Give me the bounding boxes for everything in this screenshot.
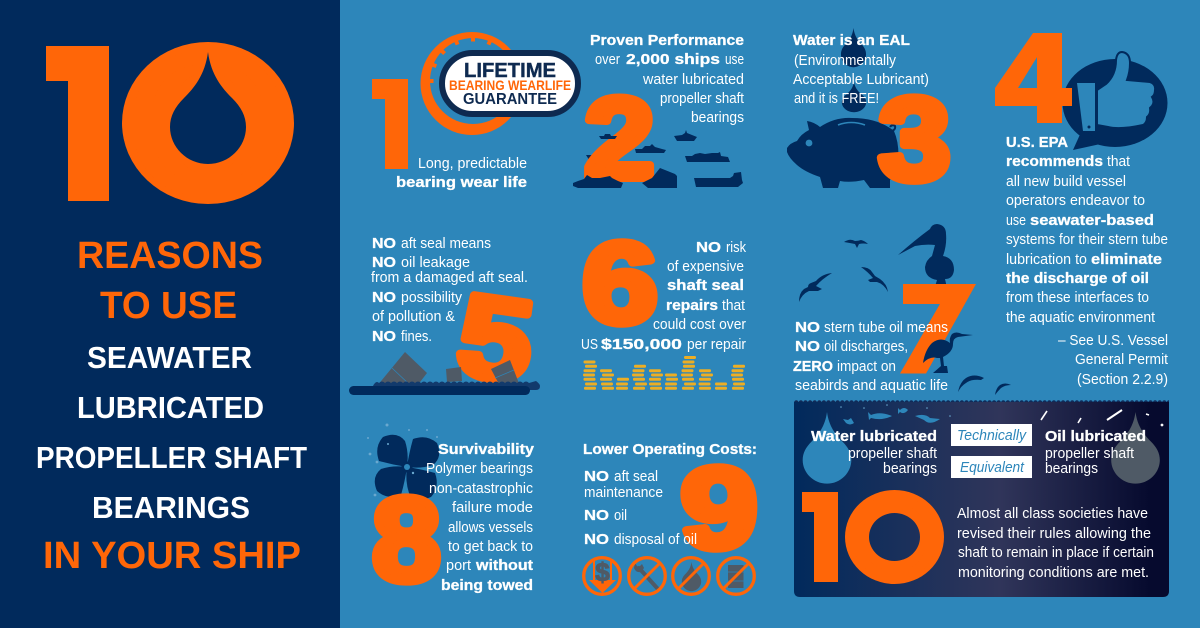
badge: lifetime bearing wearlife guarantee: LIFETIME: [464, 60, 556, 82]
text: survivability: non-catastrophic: [429, 480, 533, 497]
text: proven performance: propeller shaft: [660, 90, 745, 107]
text: no aft seal: of pollution &: [372, 308, 455, 325]
text: survivability: [426, 441, 535, 594]
text: lower operating costs: oil: [614, 507, 627, 524]
panel: reason 9 lower operating costs: [583, 441, 758, 594]
number 2: 2: [584, 74, 655, 203]
text: EPA recommendation: lubrication to: [1006, 251, 1087, 268]
text: EPA recommendation: from these interfaces to: [1006, 289, 1149, 306]
text: EPA recommendation: seawater-based: [1030, 212, 1154, 229]
text: no stern tube oil: [793, 319, 948, 394]
number 1: 1: [371, 64, 422, 188]
text: survivability: being towed: [441, 577, 533, 594]
text: survivability: allows vessels: [448, 519, 533, 536]
heading: reasons to use: REASONS: [77, 235, 263, 277]
text: EPA recommendation: that: [1107, 153, 1131, 170]
text: no aft seal: NO: [372, 254, 396, 271]
text: survivability: without: [475, 557, 533, 574]
panel: reason 1 lifetime guarantee: [371, 32, 578, 191]
icon: dead fish bones: [1041, 410, 1163, 426]
text: bearing wear life: bearing wear life: [396, 174, 527, 191]
text: no stern tube oil: NO: [795, 319, 820, 336]
text: lower operating costs: aft seal: [614, 468, 658, 485]
panel: reason 8 survivability: [367, 424, 535, 606]
text: EPA recommendation: use: [1006, 212, 1026, 229]
text: no risk of repairs: of expensive: [667, 258, 744, 275]
panel: reason 6 shaft seal repairs: [581, 219, 746, 390]
icon: no maintenance: [629, 558, 665, 594]
text: EPA recommendation: operators endeavor to: [1006, 192, 1145, 209]
number 10: 0: [852, 483, 937, 597]
text: EPA recommendation: [1006, 134, 1169, 388]
text: EPA recommendation: – See U.S. Vessel: [1058, 332, 1168, 349]
text: no risk of repairs: that: [722, 297, 746, 314]
panel: reason 10 class societies: [794, 400, 1169, 601]
text: no risk of repairs: could cost over: [653, 316, 746, 333]
text: no risk of repairs: US: [581, 336, 598, 353]
big number 10 with water drop: 1: [43, 22, 134, 234]
icon: water drop: [803, 412, 851, 484]
text: water is an EAL: Water is an EAL: [793, 32, 910, 49]
badge: lifetime bearing wearlife guarantee: [442, 53, 578, 114]
text: water lubricated: propeller shaft: [848, 445, 938, 462]
text: water lubricated: bearings: [883, 460, 937, 477]
text: class societies: revised their rules allowing the: [957, 525, 1151, 542]
text: water is an EAL: (Environmentally: [794, 52, 896, 69]
text: class societies: Almost all class societies have: [957, 505, 1148, 522]
text: no stern tube oil: NO: [795, 338, 820, 355]
text: proven performance: over: [595, 51, 620, 68]
icon: propeller: [367, 424, 439, 499]
text: no stern tube oil: seabirds and aquatic life: [795, 377, 948, 394]
text: class societies: monitoring conditions are met.: [958, 564, 1149, 581]
icon: falling water drops: [841, 28, 866, 112]
icon: piggy bank: [787, 118, 898, 188]
badge: lifetime bearing wearlife guarantee: GUARANTEE: [463, 91, 557, 108]
big number 10 with water drop: [46, 42, 294, 204]
text: EPA recommendation: General Permit: [1075, 351, 1169, 368]
text: oil lubricated: [1045, 428, 1146, 477]
text: water is an EAL: and it is FREE!: [794, 90, 879, 107]
number 10: [802, 490, 944, 584]
text: no risk of repairs: $150,000: [601, 336, 682, 353]
text: no risk of repairs: shaft seal: [667, 277, 744, 294]
text: proven performance: Proven Performance: [590, 32, 744, 49]
text: EPA recommendation: systems for their stern tube: [1006, 231, 1168, 248]
icon: floating barrels on water: [349, 352, 540, 395]
icon: fleet of ships: [573, 130, 743, 188]
text: no stern tube oil: ZERO: [793, 358, 833, 375]
panel: reason 4 U.S. EPA: [991, 14, 1169, 388]
text: survivability: Polymer bearings: [426, 460, 533, 477]
text: no aft seal: aft seal means: [401, 235, 491, 252]
text: water lubricated: [811, 428, 938, 477]
text: lower operating costs: [583, 441, 757, 548]
text: bearing wear life: [396, 155, 527, 191]
text: class societies: [957, 505, 1154, 581]
heading: reasons to use: TO USE: [100, 285, 237, 327]
badge: lifetime bearing wearlife guarantee: BEARING WEARLIFE: [449, 77, 571, 93]
text: oil lubricated: Oil lubricated: [1045, 428, 1146, 445]
panel: reason 5 no aft seal: [349, 235, 541, 408]
text: bearing wear life: Long, predictable: [418, 155, 527, 172]
number 10: 1: [799, 477, 853, 601]
text: no aft seal: [371, 235, 528, 345]
panel: reason 2 proven performance: [573, 32, 745, 203]
text: no aft seal: NO: [372, 328, 396, 345]
number 3: 3: [878, 74, 951, 205]
number 5: 5: [450, 270, 541, 408]
text: lower operating costs: NO: [584, 531, 609, 548]
text: no risk of repairs: NO: [696, 239, 721, 256]
text: EPA recommendation: recommends: [1006, 153, 1103, 170]
icon: cost down arrow: $: [595, 557, 610, 587]
text: EPA recommendation: the discharge of oil: [1006, 270, 1149, 287]
text: no risk of repairs: risk: [726, 239, 746, 256]
icon: flying seabirds: [799, 240, 888, 302]
text: survivability: to get back to: [448, 538, 533, 555]
text: lower operating costs: disposal of oil: [614, 531, 697, 548]
icon: live fish: [840, 404, 951, 424]
text: no stern tube oil: stern tube oil means: [824, 319, 948, 336]
number 7: 7: [888, 263, 972, 399]
icon: heron: [923, 332, 973, 373]
text: no aft seal: NO: [372, 289, 396, 306]
text: no risk of repairs: per repair: [687, 336, 746, 353]
icon: cost down arrow: [584, 557, 620, 594]
text: oil lubricated: propeller shaft: [1045, 445, 1135, 462]
icon: no oil barrel: [718, 558, 754, 594]
text: proven performance: [590, 32, 745, 126]
text: lower operating costs: NO: [584, 468, 609, 485]
text: survivability: port: [446, 557, 472, 574]
panel: reason 7 seabirds: [793, 224, 1011, 399]
text: no aft seal: possibility: [401, 289, 462, 306]
icon: leaping fish: [958, 376, 1011, 395]
heading: reasons to use: BEARINGS: [92, 490, 250, 525]
number 6: 6: [582, 219, 658, 347]
text: lower operating costs: NO: [584, 507, 609, 524]
text: no risk of repairs: [581, 239, 746, 353]
icon: oil drop: [1111, 412, 1160, 484]
chart: coin stacks: [583, 356, 745, 390]
panel: title sidebar: [0, 0, 340, 628]
text: lower operating costs: maintenance: [584, 484, 663, 501]
text: no aft seal: from a damaged aft seal.: [371, 269, 528, 286]
text: water lubricated: Water lubricated: [811, 428, 937, 445]
text: lower operating costs: Lower Operating Costs:: [583, 441, 757, 458]
icon: ships behind number: [586, 144, 666, 163]
icon: thumbs up speech bubble: [1062, 52, 1168, 150]
text: proven performance: 2,000 ships: [626, 51, 720, 68]
text: no risk of repairs: repairs: [666, 297, 718, 314]
text: no aft seal: oil leakage: [401, 254, 470, 271]
text: water is an EAL: Acceptable Lubricant): [793, 71, 929, 88]
number 8: 8: [372, 472, 441, 606]
icon: pelican: [898, 224, 954, 291]
text: EPA recommendation: U.S. EPA: [1006, 134, 1068, 151]
text: proven performance: water lubricated: [642, 71, 744, 88]
panel: reason 3 water is an EAL: [787, 28, 951, 205]
text: proven performance: use: [725, 51, 744, 68]
label: technically: Technically: [957, 427, 1027, 444]
label: equivalent: Equivalent: [960, 459, 1025, 476]
label: equivalent: [951, 456, 1032, 478]
text: EPA recommendation: eliminate: [1091, 251, 1162, 268]
text: no stern tube oil: impact on: [837, 358, 896, 375]
heading: reasons to use: [36, 235, 307, 577]
big number 10 with water drop: 0: [131, 24, 285, 228]
heading: reasons to use: SEAWATER: [87, 340, 252, 375]
text: no aft seal: NO: [372, 235, 396, 252]
text: EPA recommendation: all new build vessel: [1006, 173, 1126, 190]
icon: no oil: [673, 558, 709, 594]
number 4: 4: [991, 14, 1075, 147]
heading: reasons to use: PROPELLER SHAFT: [36, 440, 307, 475]
text: oil lubricated: bearings: [1045, 460, 1098, 477]
text: EPA recommendation: (Section 2.2.9): [1077, 371, 1168, 388]
text: EPA recommendation: the aquatic environment: [1006, 309, 1156, 326]
text: proven performance: bearings: [691, 109, 744, 126]
number 9: 9: [680, 445, 758, 573]
text: no aft seal: fines.: [401, 328, 432, 345]
heading: reasons to use: IN YOUR SHIP: [43, 535, 301, 577]
text: class societies: shaft to remain in place if certain: [958, 544, 1154, 561]
text: water is an EAL: [793, 32, 929, 107]
text: survivability: failure mode: [452, 499, 533, 516]
icon: gear ring: [420, 32, 524, 135]
text: survivability: Survivability: [438, 441, 535, 458]
text: no stern tube oil: oil discharges,: [824, 338, 908, 355]
heading: reasons to use: LUBRICATED: [77, 390, 264, 425]
